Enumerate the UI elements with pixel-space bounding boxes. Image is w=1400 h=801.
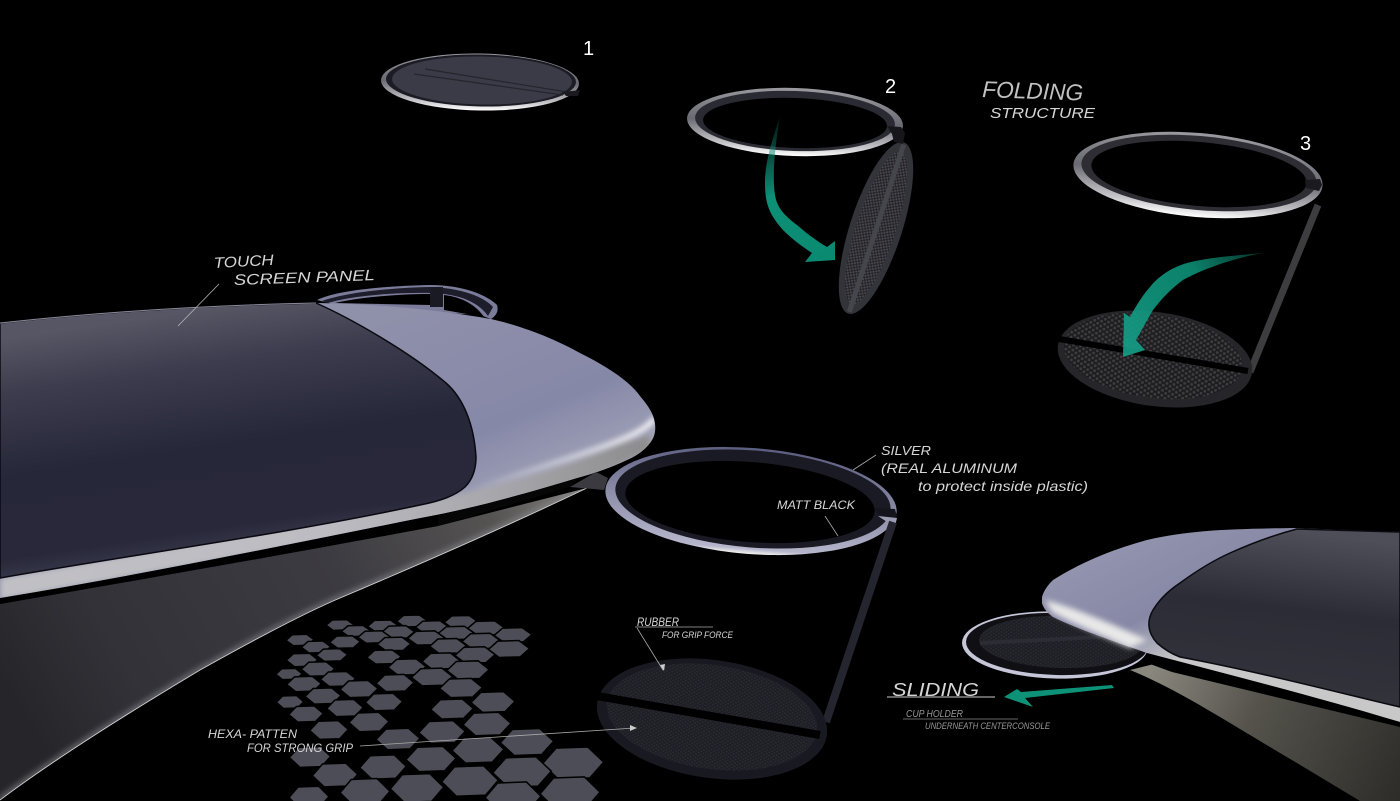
ring 3 base disc xyxy=(1051,299,1259,419)
leader line xyxy=(360,728,635,746)
sliding arrow xyxy=(1004,685,1114,707)
title line 1: FOLDING xyxy=(982,76,1084,106)
rubber surface xyxy=(600,651,824,783)
rear ring opening xyxy=(335,294,484,317)
main console xyxy=(0,303,655,800)
console 2 black lip xyxy=(1147,658,1400,727)
ring 1 silver rim xyxy=(381,52,579,112)
text: sliding: SLIDING xyxy=(892,680,979,700)
ring 3 rim xyxy=(1070,122,1326,228)
label: hexa pattern xyxy=(208,725,637,755)
console 2 nose highlight xyxy=(1045,600,1147,648)
shell notch xyxy=(438,479,577,526)
ring behind main console xyxy=(317,285,498,319)
underline xyxy=(887,696,995,698)
leader arrowhead xyxy=(630,725,637,731)
leader line xyxy=(178,284,219,326)
touch screen panel xyxy=(0,303,476,578)
hexa pattern xyxy=(276,615,604,801)
title: folding structure xyxy=(982,76,1096,122)
text: real aluminum: (REAL ALUMINUM xyxy=(881,460,1017,476)
text: touch: TOUCH xyxy=(213,252,274,272)
step 2: disc folding down xyxy=(686,84,929,322)
centre slot xyxy=(597,696,820,735)
rear ring dark band xyxy=(322,287,493,316)
text: screen panel: SCREEN PANEL xyxy=(234,267,375,289)
text: for grip force: FOR GRIP FORCE xyxy=(662,630,734,640)
label: sliding xyxy=(887,680,1051,731)
text: silver: SILVER xyxy=(881,443,931,458)
ring opening xyxy=(622,452,878,552)
arrow 2 xyxy=(765,117,835,262)
step 3: fully unfolded xyxy=(1051,122,1326,419)
title line 2: STRUCTURE xyxy=(990,105,1096,122)
rear ring hinge xyxy=(430,287,443,307)
number 2: 2 xyxy=(885,76,896,98)
leader line xyxy=(853,455,876,470)
ring 1 hinge xyxy=(563,90,580,96)
underside lit edge xyxy=(0,488,587,800)
base disc detail xyxy=(589,644,835,794)
base rim xyxy=(589,644,835,794)
ring 2 folded disc xyxy=(823,134,929,322)
text: cup holder: CUP HOLDER xyxy=(906,709,963,720)
ring 1 dark border xyxy=(386,53,576,108)
console 2 screen xyxy=(1149,529,1400,707)
ring 1 panel surface xyxy=(392,55,572,106)
step 1: closed cup holder xyxy=(381,52,580,112)
top edge light xyxy=(0,303,316,323)
console 2 silver shell xyxy=(1042,528,1400,722)
label: silver aluminium xyxy=(853,443,1088,494)
ring 3 hinge xyxy=(1305,179,1322,191)
console 2 underside xyxy=(1130,660,1400,801)
label: rubber xyxy=(635,615,734,670)
label: touch screen panel xyxy=(178,252,375,326)
leader line xyxy=(825,516,838,536)
console underside body xyxy=(0,488,587,800)
text: hexa pattern: HEXA- PATTEN xyxy=(208,727,297,741)
silver shell xyxy=(0,303,655,598)
ring 2 rim xyxy=(686,84,904,160)
ring 1 slot xyxy=(414,69,567,95)
ring hinge cut xyxy=(878,516,897,526)
underline 2 xyxy=(903,718,1018,720)
label: matt black xyxy=(777,498,856,536)
bottom right console: sliding view xyxy=(961,528,1400,801)
leader with arrowhead xyxy=(635,627,713,670)
text: underneath center console: UNDERNEATH CENTERCONSOLE xyxy=(925,721,1051,731)
text: rubber: RUBBER xyxy=(637,615,679,629)
shell highlight xyxy=(0,418,655,600)
ring silver rim xyxy=(601,437,901,565)
number 3: 3 xyxy=(1300,133,1311,155)
rear ring rim xyxy=(317,285,498,319)
ring 3 arm xyxy=(1250,205,1318,372)
rubber leader arrowhead xyxy=(660,664,665,671)
sliding disc xyxy=(961,609,1149,681)
support arm xyxy=(826,522,893,722)
black lip under shell xyxy=(0,516,438,604)
number 1: 1 xyxy=(583,38,594,60)
ring hinge xyxy=(875,508,897,520)
text: to protect: to protect inside plastic) xyxy=(918,478,1088,494)
arrow 3 xyxy=(1123,253,1263,357)
text: matt black: MATT BLACK xyxy=(777,498,856,512)
ring 2 hinge xyxy=(887,126,905,144)
underside glow along edge xyxy=(0,488,587,800)
text: for strong grip: FOR STRONG GRIP xyxy=(247,741,353,755)
large ring detail xyxy=(570,437,901,565)
ring matt black band xyxy=(612,440,894,558)
attachment tab xyxy=(570,472,608,490)
